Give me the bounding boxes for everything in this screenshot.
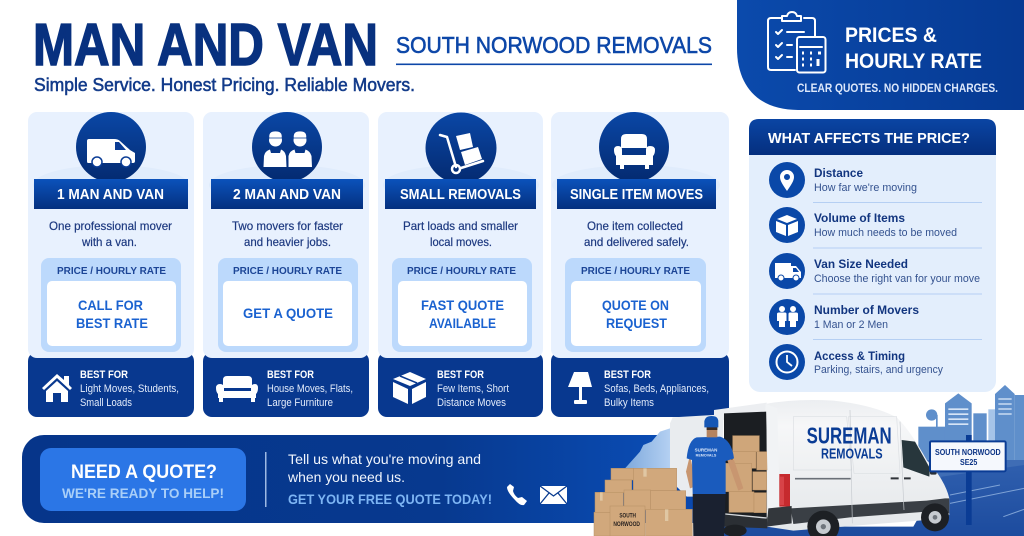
call to action text: GET YOUR FREE QUOTE TODAY! bbox=[288, 491, 492, 507]
subtitle: South Norwood Removals: SOUTH NORWOOD REMOVALS bbox=[396, 32, 712, 58]
panel: 2 man and van bbox=[203, 112, 369, 417]
description bbox=[584, 219, 689, 249]
price box: CALL FOR bbox=[78, 297, 143, 313]
heading: small removals bbox=[385, 179, 536, 209]
rear door bbox=[670, 414, 723, 497]
price box bbox=[41, 258, 181, 352]
mover bbox=[686, 416, 743, 536]
open door edge bbox=[766, 404, 780, 522]
price box bbox=[392, 258, 532, 352]
mover: REMOVALS bbox=[696, 453, 717, 458]
price box: AVAILABLE bbox=[429, 315, 496, 331]
icon: hand truck with boxes bbox=[440, 133, 483, 173]
item: volume of items: Volume of Items bbox=[814, 211, 905, 225]
best for text: BEST FOR bbox=[80, 369, 128, 381]
item: access and timing: Parking, stairs, and urgency bbox=[814, 364, 943, 376]
item: distance bbox=[769, 162, 917, 198]
best for text: BEST FOR bbox=[604, 369, 651, 381]
item: van size needed: Van Size Needed bbox=[814, 257, 908, 271]
skyline left bbox=[625, 428, 670, 468]
icon: lamp bbox=[568, 372, 592, 404]
skyline right bbox=[918, 385, 1024, 483]
description bbox=[232, 219, 343, 249]
item: van size needed bbox=[769, 253, 980, 289]
description bbox=[403, 219, 518, 249]
item: number of movers: 1 Man or 2 Men bbox=[814, 319, 888, 331]
description: One item collected bbox=[587, 219, 683, 233]
description: with a van. bbox=[81, 235, 137, 249]
price box: PRICE / HOURLY RATE bbox=[57, 265, 166, 277]
call to action text: Tell us what you're moving and bbox=[288, 451, 481, 467]
icon: sofa bbox=[216, 376, 258, 402]
item: distance: Distance bbox=[814, 166, 863, 180]
description: One professional mover bbox=[49, 219, 172, 233]
heading: small removals: SMALL REMOVALS bbox=[400, 187, 521, 203]
panel: prices and hourly rate: CLEAR QUOTES. NO HIDDEN CHARGES. bbox=[797, 83, 998, 95]
best for text: Distance Moves bbox=[437, 397, 506, 409]
heading: what affects the price: WHAT AFFECTS THE PRICE? bbox=[768, 130, 970, 147]
road bbox=[703, 465, 1024, 536]
van body bbox=[765, 400, 949, 531]
item: access and timing bbox=[769, 344, 943, 380]
description: and heavier jobs. bbox=[244, 235, 331, 249]
street sign: SOUTH NORWOOD bbox=[935, 448, 1001, 457]
best for text: BEST FOR bbox=[267, 369, 314, 381]
panel: single item moves bbox=[551, 112, 729, 417]
best for text bbox=[80, 369, 179, 409]
button: need a quote: NEED A QUOTE? bbox=[71, 462, 217, 483]
price box: FAST QUOTE bbox=[421, 297, 504, 313]
description: local moves. bbox=[430, 235, 492, 249]
price box: PRICE / HOURLY RATE bbox=[581, 265, 690, 277]
price box: PRICE / HOURLY RATE bbox=[407, 265, 516, 277]
heading: single item moves bbox=[557, 179, 716, 209]
window bbox=[902, 440, 930, 477]
heading: what affects the price bbox=[749, 119, 996, 155]
best for text: Large Furniture bbox=[267, 397, 333, 409]
van lettering: REMOVALS bbox=[821, 446, 883, 462]
van lettering bbox=[807, 422, 892, 462]
stacked boxes bbox=[594, 468, 692, 536]
street sign bbox=[930, 435, 1006, 525]
illustration: van, mover, boxes and skyline bbox=[594, 385, 1024, 536]
item: number of movers: Number of Movers bbox=[814, 303, 919, 317]
call to action text: when you need us. bbox=[287, 469, 405, 485]
best for text bbox=[267, 369, 353, 409]
price box: PRICE / HOURLY RATE bbox=[233, 265, 342, 277]
item: van size needed: Choose the right van for your move bbox=[814, 273, 980, 285]
icon: van bbox=[87, 139, 135, 167]
panel: prices and hourly rate: HOURLY RATE bbox=[845, 50, 982, 73]
icon: two workers bbox=[264, 131, 312, 167]
load boxes bbox=[725, 436, 767, 513]
price box bbox=[565, 258, 706, 352]
call to action text bbox=[287, 451, 492, 507]
best for text bbox=[437, 369, 509, 409]
best for text: Few Items, Short bbox=[437, 383, 509, 395]
price box: REQUEST bbox=[606, 315, 667, 331]
heading: 1 man and van bbox=[34, 179, 188, 209]
icon: clipboard and calculator bbox=[768, 12, 826, 72]
heading: 2 man and van: 2 MAN AND VAN bbox=[233, 187, 341, 203]
icon: phone bbox=[507, 484, 527, 505]
description: Two movers for faster bbox=[232, 219, 343, 233]
price box: QUOTE ON bbox=[602, 297, 669, 313]
icon: box bbox=[393, 372, 426, 404]
heading: 2 man and van bbox=[211, 179, 363, 209]
tagline: Simple Service. Honest Pricing. Reliable Movers. bbox=[34, 74, 415, 95]
button: need a quote bbox=[40, 448, 246, 511]
heading: single item moves: SINGLE ITEM MOVES bbox=[570, 187, 703, 203]
price box: GET A QUOTE bbox=[243, 305, 333, 321]
best for text: Sofas, Beds, Appliances, bbox=[604, 383, 709, 395]
best for text: House Moves, Flats, bbox=[267, 383, 353, 395]
price box bbox=[218, 258, 358, 352]
best for text: Light Moves, Students, bbox=[80, 383, 179, 395]
description bbox=[49, 219, 172, 249]
description: and delivered safely. bbox=[584, 235, 689, 249]
heading: 1 man and van: 1 MAN AND VAN bbox=[57, 187, 164, 203]
description: Part loads and smaller bbox=[403, 219, 518, 233]
panel: prices and hourly rate bbox=[737, 0, 1024, 110]
best for text bbox=[604, 369, 709, 409]
item: volume of items bbox=[769, 207, 957, 243]
van lettering: SUREMAN bbox=[807, 422, 892, 448]
wheels bbox=[723, 503, 949, 536]
panel: what affects the price bbox=[749, 119, 996, 392]
panel: small removals bbox=[378, 112, 543, 417]
icon: house bbox=[42, 374, 72, 402]
interior bbox=[724, 412, 767, 517]
item: number of movers bbox=[769, 299, 919, 335]
item: access and timing: Access & Timing bbox=[814, 349, 905, 363]
title: MAN AND VAN bbox=[33, 12, 378, 78]
stacked boxes: SOUTH bbox=[619, 514, 636, 520]
price box: BEST RATE bbox=[76, 315, 148, 331]
street sign: SE25 bbox=[960, 458, 978, 467]
icon: armchair bbox=[614, 134, 655, 169]
best for text: Small Loads bbox=[80, 397, 132, 409]
icon: envelope bbox=[540, 486, 567, 504]
panel: prices and hourly rate: PRICES & bbox=[845, 24, 937, 47]
mover: SUREMAN bbox=[695, 448, 718, 454]
best for text: BEST FOR bbox=[437, 369, 484, 381]
panel: call to action banner bbox=[22, 435, 722, 523]
item: volume of items: How much needs to be moved bbox=[814, 227, 957, 239]
item: distance: How far we're moving bbox=[814, 182, 917, 194]
button: need a quote: WE'RE READY TO HELP! bbox=[62, 485, 224, 501]
best for text: Bulky Items bbox=[604, 397, 654, 409]
panel: 1 man and van bbox=[28, 112, 194, 417]
stacked boxes: NORWOOD bbox=[613, 522, 641, 528]
